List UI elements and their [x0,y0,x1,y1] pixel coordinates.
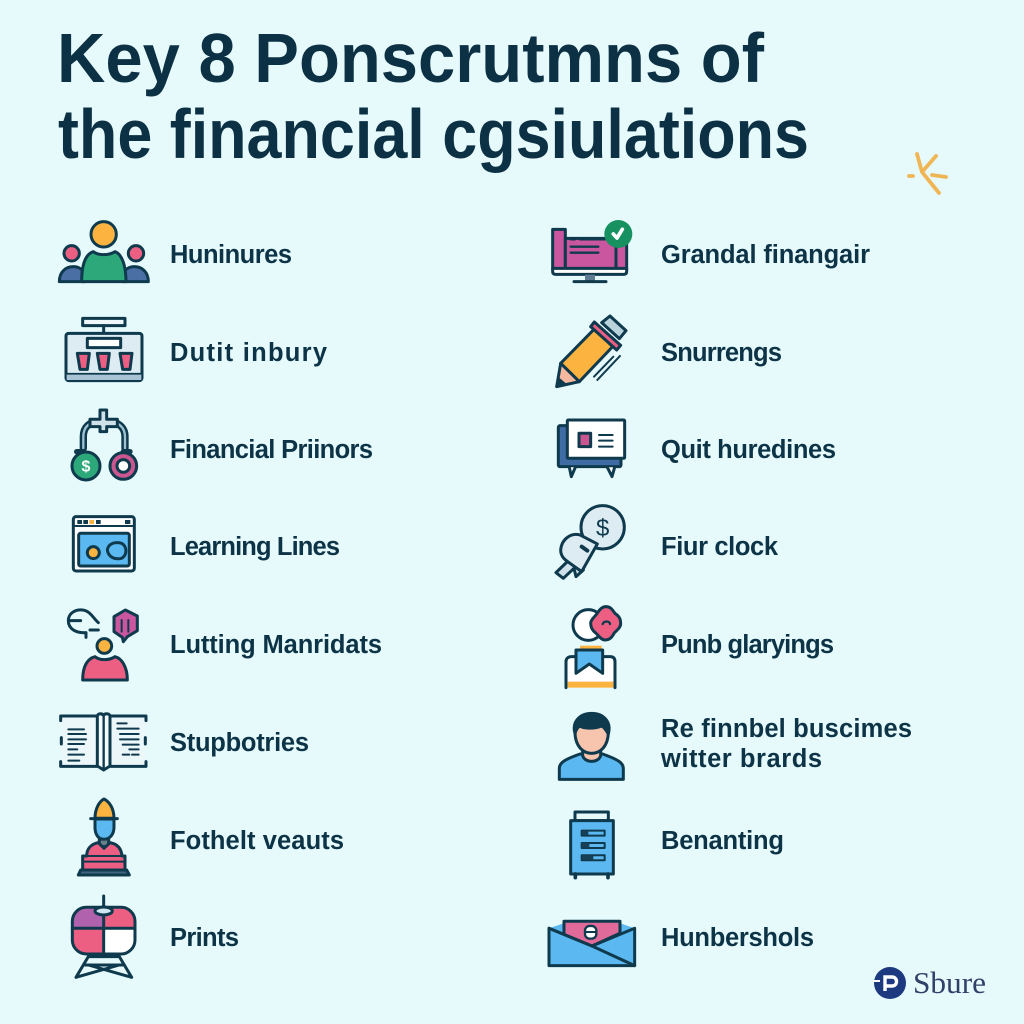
label: Snurrengs [661,339,782,367]
icon: open envelope [549,921,635,966]
label: Fothelt veauts [170,827,344,855]
label: Lutting Manridats [170,631,382,659]
label: Benanting [661,827,784,855]
icon: monitor with check badge [553,220,632,282]
label: Re finnbel buscimes [661,715,912,743]
label: Learning Lines [170,533,340,561]
label: Grandal finangair [661,241,870,269]
icon: open book [61,714,146,770]
label [660,715,912,773]
label: Stupbotries [170,729,309,757]
title [57,19,809,173]
title: the financial cgsiulations [58,95,809,173]
title: Key 8 Ponscrutmns of [57,19,765,97]
label: Quit huredines [661,436,836,464]
icon: scales with coins [72,410,137,480]
label: Financial Priinors [170,436,373,464]
label: witter brards [660,745,822,773]
icon: browser window [73,517,134,571]
icon: scales with coins: $ [82,459,91,476]
icon: pencil [557,316,626,387]
label: Fiur clock [661,533,779,561]
label: Hunbershols [661,924,814,952]
icon: plug with dollar coin [556,506,624,578]
icon: worker with hard hat [78,799,129,875]
icon: quartered dial on stand [72,896,135,977]
label: Prints [170,924,239,952]
icon: plug with dollar coin: $ [596,515,609,542]
icon: org board [66,318,142,381]
logo: Sbure: Sbure [913,965,986,1000]
icon: document cabinet [571,812,613,878]
icon: person with thoughts [68,610,137,680]
label: Dutit inbury [170,339,328,367]
icon: presentation board [558,420,625,477]
label: Huninures [170,241,292,269]
label: Punb glaryings [661,631,834,659]
icon: team of people [59,222,148,282]
icon: orange star spark [909,154,946,193]
logo: Sbure [873,965,986,1000]
icon: ribbon badge [566,607,621,688]
icon: person portrait [559,713,623,779]
